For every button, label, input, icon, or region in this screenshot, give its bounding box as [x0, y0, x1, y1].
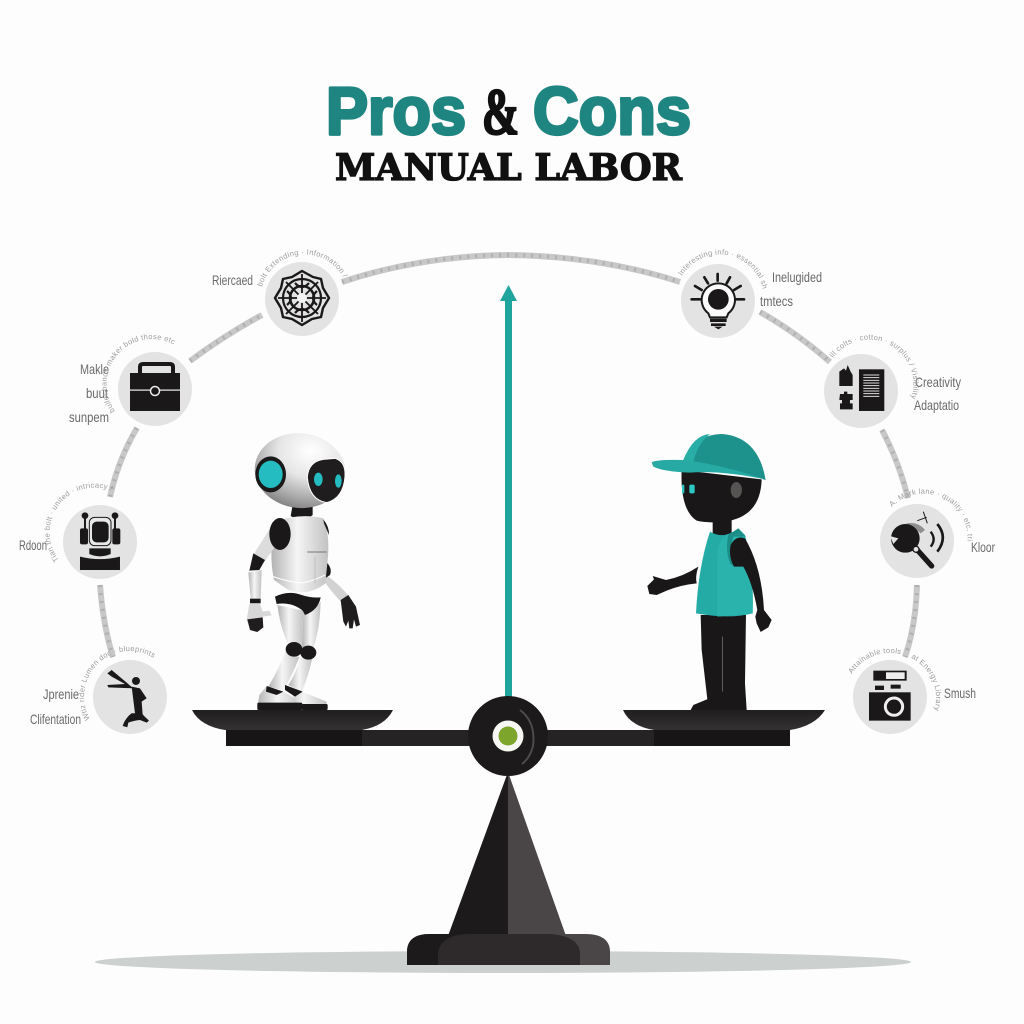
robot right arm — [323, 562, 360, 628]
ground shadow — [95, 951, 911, 973]
worker cap — [652, 434, 766, 480]
scale pivot hub — [468, 696, 548, 776]
caption: Jprenie — [43, 686, 79, 702]
worker far arm — [647, 567, 698, 595]
scale beam — [226, 730, 790, 746]
icon node: document: ill colts · cotton · surplus / Visibility — [829, 334, 919, 400]
caption — [914, 374, 961, 413]
caption: buut — [86, 385, 108, 401]
center arrow — [500, 285, 517, 698]
icon node: camera: at Energy Library — [912, 655, 942, 712]
robot legs — [257, 602, 328, 710]
worker near arm — [730, 537, 772, 632]
icon node: light bulb: Interesting info · essential shop / — [678, 249, 768, 289]
caption: Adaptatio — [914, 397, 959, 413]
caption: Ineluɡided — [772, 269, 822, 285]
caption: Creativity — [915, 374, 961, 390]
caption: Riercaed — [212, 272, 253, 288]
caption: Smush — [944, 685, 976, 701]
icon node: web: bolt Extending · Information / — [256, 249, 348, 286]
human worker figure — [647, 434, 772, 710]
heading: pros and cons — [326, 74, 691, 149]
heading: pros and cons: Cons — [533, 74, 691, 149]
caption — [760, 269, 822, 309]
icon node: machine — [19, 482, 137, 579]
caption: tmtecs — [760, 293, 793, 309]
caption — [69, 361, 109, 425]
arc connecting the icons — [100, 255, 917, 657]
worker face details — [682, 482, 742, 498]
icon node: magnifier: A. Mark lane · quality · etc. tri — [890, 488, 973, 541]
caption: Makle — [80, 361, 109, 377]
worker head — [682, 470, 762, 522]
icon node: magnifier — [880, 488, 995, 578]
icon node: briefcase: bullet hands maker bold those etc — [101, 334, 175, 414]
icon node: figure: Wtiz rider Lumen doc · blueprints — [78, 646, 155, 722]
icon node: camera — [848, 648, 976, 734]
right pan — [623, 710, 825, 746]
worker shirt — [696, 528, 753, 617]
robot head — [251, 429, 349, 513]
icon node: web — [212, 249, 348, 336]
icon node: camera: Attainable tools — [848, 648, 901, 674]
robot figure — [247, 429, 360, 710]
left pan — [192, 710, 393, 746]
balance scale — [95, 696, 911, 973]
caption: Rdoon — [19, 537, 47, 553]
worker neck — [713, 518, 732, 538]
icon node: machine: Tian the bolt · united · intricacy / — [44, 482, 114, 563]
scale post — [448, 772, 566, 936]
worker legs — [691, 615, 747, 710]
icon node: document — [824, 334, 961, 428]
icon node: light bulb — [678, 249, 822, 338]
caption: sunpem — [69, 409, 109, 425]
robot torso — [271, 516, 329, 615]
caption: Clifentation — [30, 711, 81, 727]
title — [326, 74, 691, 189]
robot left arm — [247, 518, 291, 632]
caption — [30, 686, 81, 727]
icon node: figure — [30, 646, 167, 734]
caption: Kloor — [971, 539, 995, 555]
scale base — [407, 934, 610, 965]
icon node: briefcase — [69, 334, 192, 426]
heading: pros and cons: Pros — [326, 74, 466, 149]
robot neck — [291, 505, 313, 519]
heading: pros and cons: & — [482, 76, 519, 149]
heading: manual labor: MANUAL LABOR — [335, 147, 683, 189]
